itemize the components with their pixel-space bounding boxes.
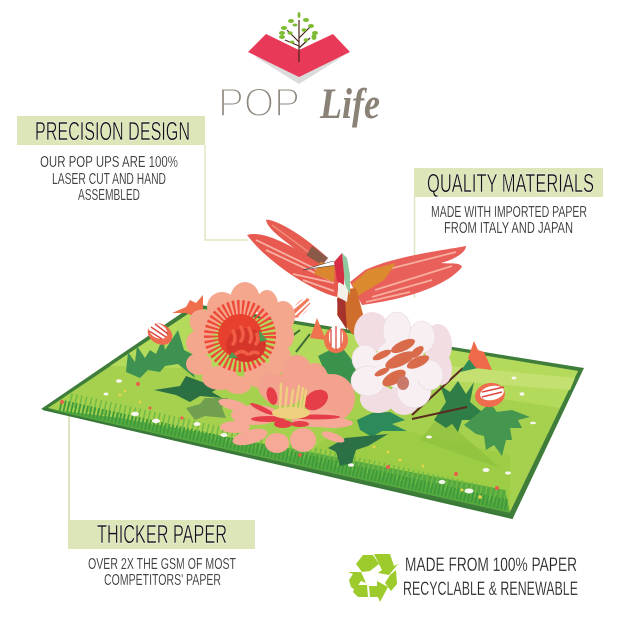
logo chevron	[248, 34, 350, 84]
bud: upper centre	[289, 295, 313, 321]
text: precision design body: OUR POP UPS ARE 100%	[40, 154, 178, 171]
text: thicker paper body: COMPETITORS' PAPER	[104, 572, 221, 589]
text: precision design body: ASSEMBLED	[78, 187, 140, 204]
logo tree	[279, 12, 318, 62]
label: precision design: PRECISION DESIGN	[35, 118, 190, 146]
connector lines	[69, 145, 414, 520]
logo wordmark POP: POP	[218, 81, 300, 125]
bud: top left flower	[172, 295, 203, 318]
label: thicker paper	[68, 520, 255, 549]
meadow flowers	[60, 376, 536, 499]
bud: right flower	[468, 341, 492, 370]
body	[334, 253, 364, 335]
flower: pink peony	[217, 355, 355, 453]
pop-up card base	[41, 304, 584, 518]
flower: red peony	[185, 282, 295, 394]
foliage	[126, 330, 530, 466]
wing: rear left	[266, 220, 328, 268]
flower: white	[351, 312, 452, 415]
label: thicker paper: THICKER PAPER	[97, 521, 227, 549]
bud: behind white flower	[310, 318, 348, 353]
meadow grass	[43, 400, 513, 518]
buds	[144, 295, 507, 410]
label: precision design	[17, 116, 205, 146]
hummingbird	[247, 220, 466, 335]
text: quality materials body	[431, 204, 587, 237]
icon: recycle	[348, 554, 398, 602]
wing: front left	[247, 234, 342, 297]
text: precision design body: LASER CUT AND HAND	[52, 171, 166, 188]
bud: left	[144, 319, 176, 349]
text: quality materials body: FROM ITALY AND JAPAN	[444, 220, 573, 237]
wing: right	[350, 246, 466, 305]
text: precision design body	[40, 154, 178, 204]
text: recycling note	[403, 555, 578, 600]
text: thicker paper body: OVER 2X THE GSM OF MOST	[88, 556, 236, 573]
text: thicker paper body	[88, 556, 236, 589]
bud: right striped	[473, 380, 507, 410]
logo	[218, 12, 380, 128]
logo wordmark Life: Life	[319, 81, 380, 128]
